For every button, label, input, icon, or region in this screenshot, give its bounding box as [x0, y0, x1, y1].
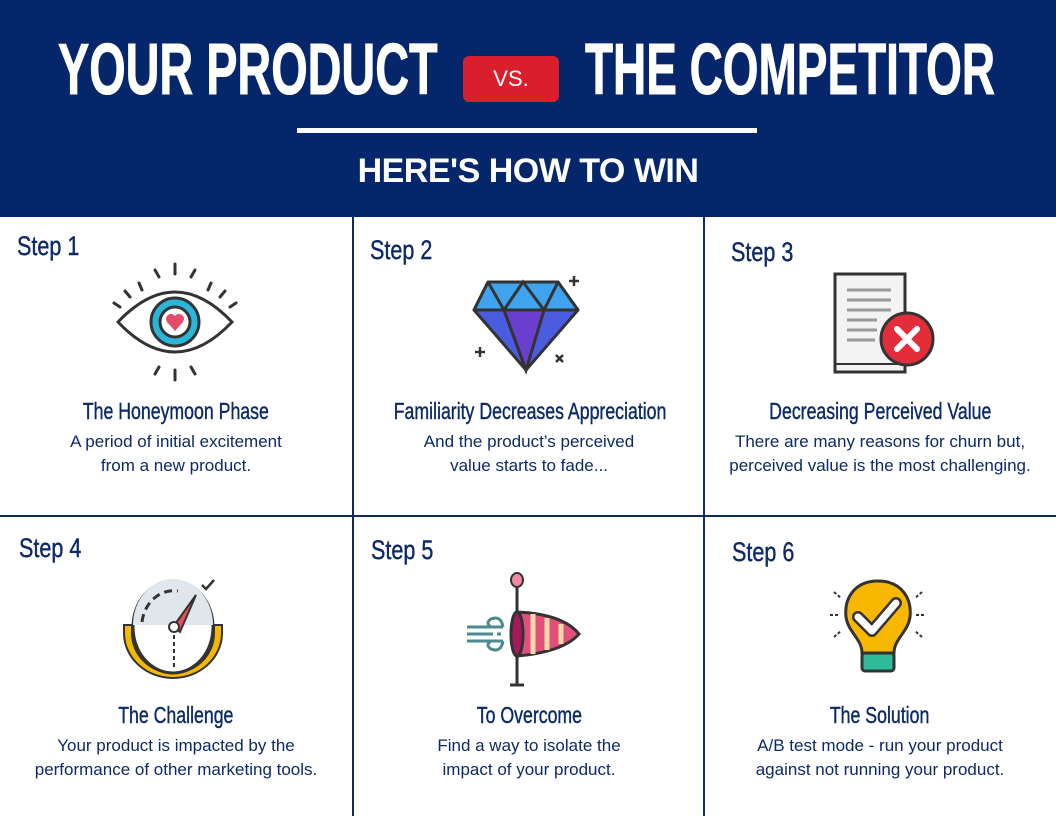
text — [424, 432, 634, 475]
icon: diamond — [472, 276, 580, 375]
vs badge — [463, 56, 559, 102]
text: A/B test mode - run your product — [757, 736, 1003, 755]
text — [729, 432, 1031, 475]
text: against not running your product. — [756, 760, 1004, 779]
icon: gauge — [123, 579, 223, 679]
step 5 label: Step 5 — [371, 535, 433, 565]
heading: Familiarity Decreases Appreciation — [394, 398, 666, 424]
title left: YOUR PRODUCT — [58, 30, 438, 110]
text — [70, 432, 282, 475]
heading: The Solution — [830, 702, 930, 728]
panel: step 1 — [17, 231, 282, 475]
divider line — [297, 128, 757, 133]
step 6 label: Step 6 — [732, 537, 794, 567]
step 3 label: Step 3 — [731, 237, 793, 267]
text: There are many reasons for churn but, — [735, 432, 1025, 451]
grid lines — [352, 217, 354, 816]
text — [756, 736, 1004, 779]
text: performance of other marketing tools. — [35, 760, 317, 779]
icon: eye with heart — [112, 262, 238, 382]
panel: step 6 — [732, 537, 1004, 779]
text: Your product is impacted by the — [57, 736, 295, 755]
heading: Decreasing Perceived Value — [769, 398, 991, 424]
text: from a new product. — [101, 456, 251, 475]
text: Find a way to isolate the — [437, 736, 621, 755]
text: And the product’s perceived — [424, 432, 634, 451]
panel: step 5 — [371, 535, 621, 779]
step 4 label: Step 4 — [19, 533, 81, 563]
subtitle: HERE'S HOW TO WIN — [358, 152, 698, 190]
text: value starts to fade... — [450, 456, 608, 475]
vs badge: VS. — [493, 66, 529, 91]
panel: step 2 — [370, 235, 666, 475]
panel: step 3 — [729, 237, 1031, 475]
panel: step 4 — [19, 533, 317, 779]
text: A period of initial excitement — [70, 432, 282, 451]
title right: THE COMPETITOR — [585, 30, 995, 110]
text: impact of your product. — [443, 760, 615, 779]
heading: The Honeymoon Phase — [83, 398, 269, 424]
header banner — [0, 0, 1056, 217]
text: perceived value is the most challenging. — [729, 456, 1031, 475]
text — [35, 736, 317, 779]
text — [437, 736, 621, 779]
step 1 label: Step 1 — [17, 231, 79, 261]
icon: windsock — [467, 572, 581, 686]
step 2 label: Step 2 — [370, 235, 432, 265]
heading: The Challenge — [118, 702, 234, 728]
heading: To Overcome — [476, 702, 582, 728]
icon: document with x — [834, 272, 934, 374]
icon: light bulb — [830, 580, 924, 672]
